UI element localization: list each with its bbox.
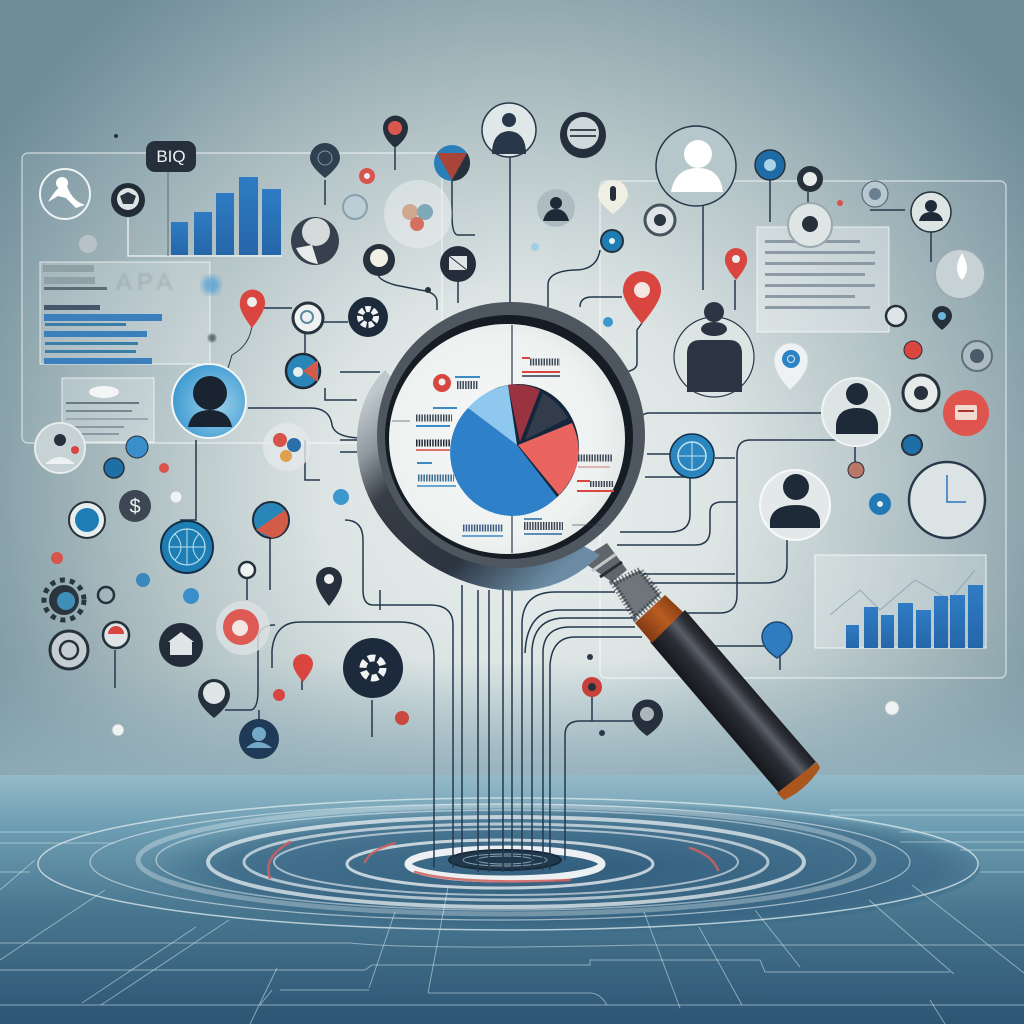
icon: avatar right middle [822, 378, 890, 446]
icon: red card badge [943, 390, 989, 436]
rim side wall [357, 370, 600, 591]
icon: assorted dark badges: $ [129, 496, 141, 518]
connector lines [115, 148, 931, 872]
left text panel [40, 262, 220, 364]
icon: gear badges [44, 297, 403, 698]
right text panel [757, 227, 889, 332]
rim [377, 302, 645, 568]
ripple rings on floor [38, 798, 978, 930]
icon: avatar right of lens [674, 302, 754, 397]
magnifying glass [357, 302, 820, 800]
icon: assorted dark badges [35, 112, 992, 759]
bar chart top left [128, 172, 282, 256]
icon: globe badge right of lens [670, 434, 714, 478]
left text panel: APA [116, 269, 177, 296]
icon: large white person [656, 126, 736, 206]
icon: person top center [482, 103, 536, 157]
label: BIQ: BIQ [156, 147, 186, 166]
background wall [0, 0, 1024, 780]
handle body [650, 610, 816, 794]
copper bands [635, 595, 820, 800]
glass panels [22, 153, 1006, 678]
lens labels [416, 358, 614, 536]
icon: location pins [198, 116, 952, 736]
floor [0, 775, 1024, 1024]
icon: clock [909, 462, 985, 538]
icon: blue avatar left [172, 364, 246, 438]
pie chart [450, 384, 579, 516]
small accent dots [51, 134, 899, 736]
bar chart bottom right [815, 555, 986, 648]
lens [389, 324, 625, 554]
icon: avatar lower right [760, 470, 830, 540]
neck [580, 543, 660, 618]
small note panel [62, 378, 154, 442]
icon: globe badge lower left [161, 521, 213, 573]
label: BIQ [146, 141, 196, 172]
